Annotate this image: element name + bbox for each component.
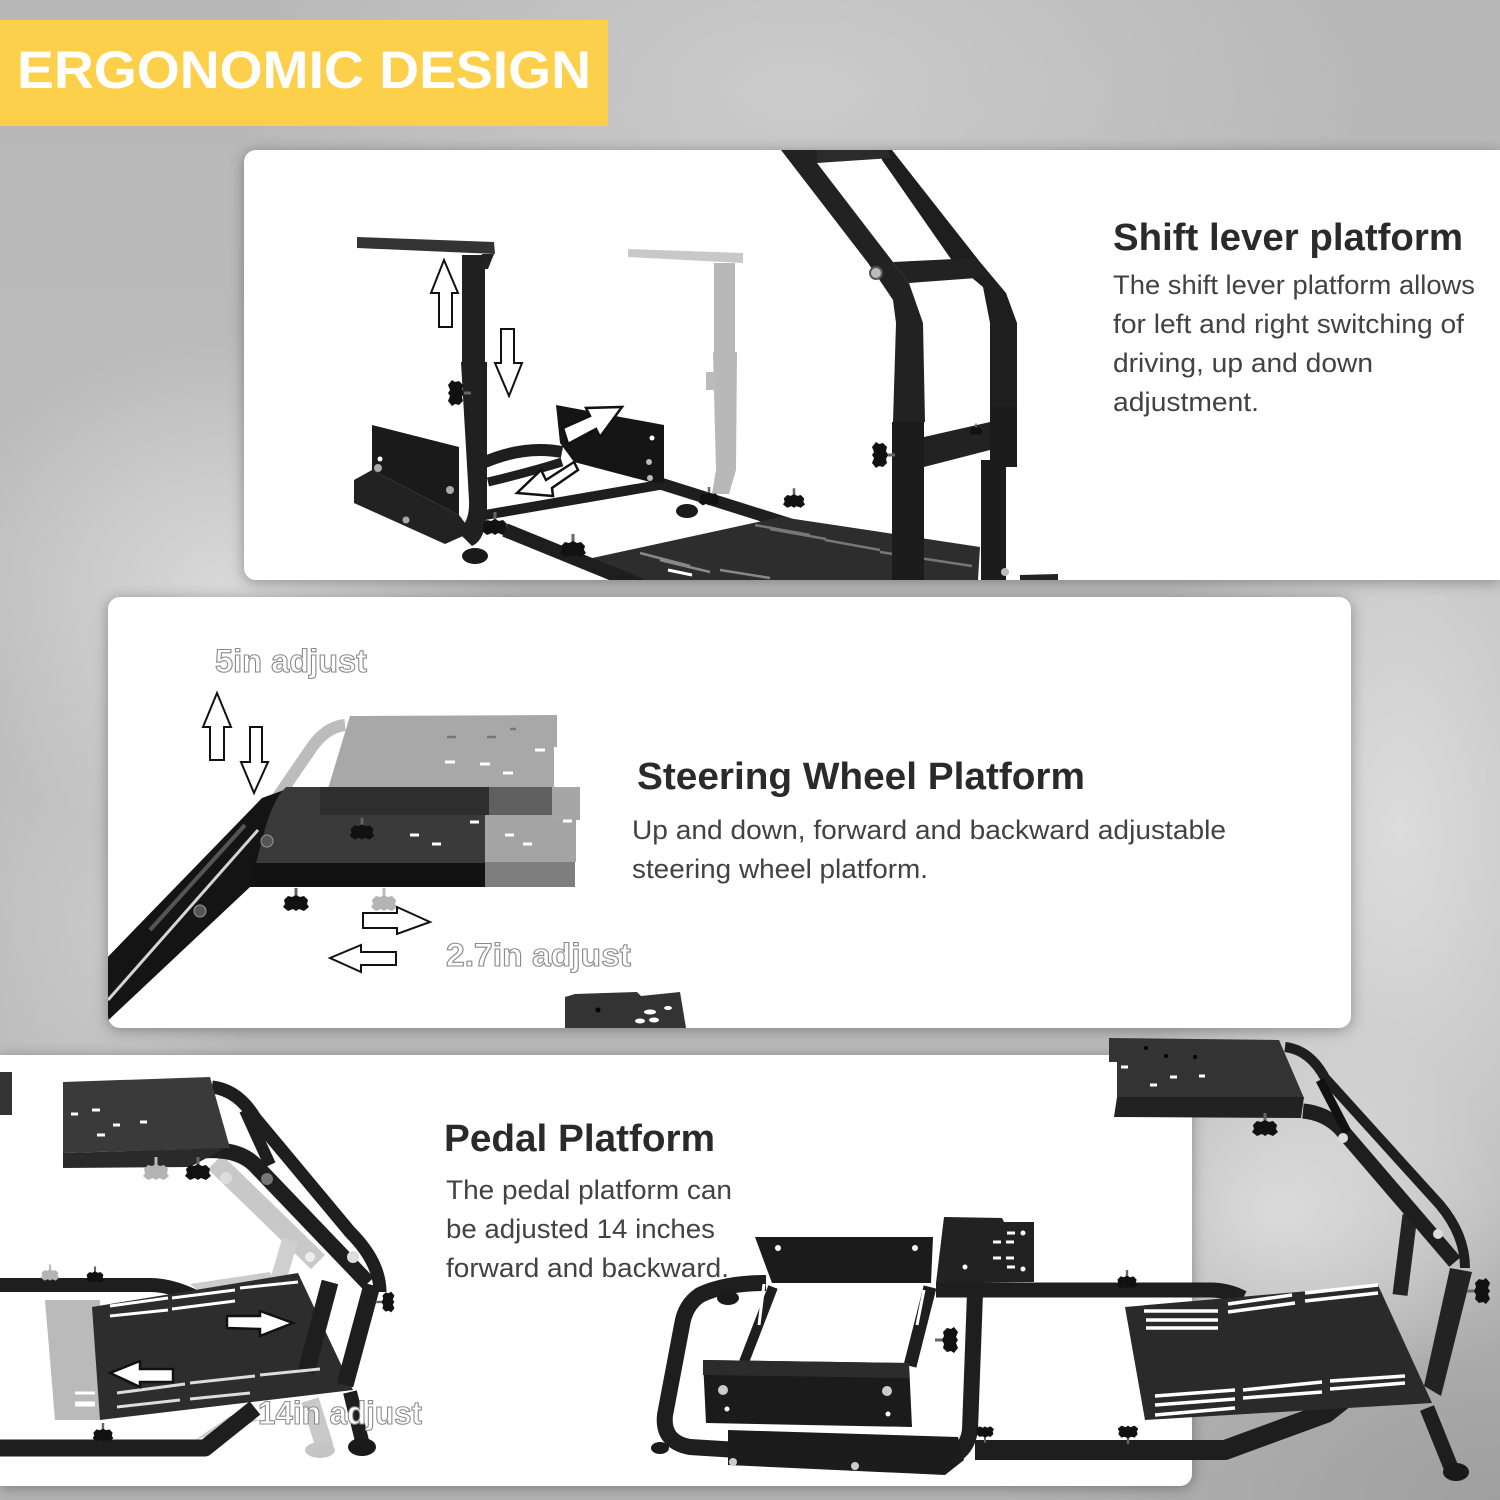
arrow: right — [363, 907, 430, 934]
arrow: left — [110, 1361, 173, 1387]
photo: pedal plate section — [505, 517, 980, 585]
photo: full assembled cockpit frame — [651, 1038, 1490, 1481]
arrow: down — [495, 329, 522, 396]
description: The pedal platform can — [446, 1175, 732, 1205]
panel: steering wheel platform — [100, 597, 1351, 1028]
description — [1113, 270, 1475, 417]
arrow: back left — [517, 462, 578, 496]
outline label: 2.7in adjust: 2.7in adjust — [446, 937, 631, 973]
description: Up and down, forward and backward adjustable — [632, 815, 1226, 845]
photo: ghost shift arm — [628, 249, 743, 494]
arrow: up — [203, 693, 231, 760]
photo: wheel hoop frame — [781, 150, 1058, 580]
heading: Shift lever platform — [1113, 217, 1463, 259]
photo: adjusted plate and arm — [100, 787, 580, 1028]
heading: Steering Wheel Platform — [637, 756, 1085, 798]
description: The shift lever platform allows — [1113, 270, 1475, 300]
photo: shift lever frame — [354, 237, 805, 564]
arrow: down — [241, 727, 268, 793]
description — [632, 815, 1226, 884]
banner: ergonomic design — [0, 20, 608, 126]
description — [446, 1175, 732, 1283]
arrow: forward right — [563, 407, 622, 444]
description: driving, up and down — [1113, 348, 1373, 378]
banner title: ERGONOMIC DESIGN — [17, 41, 591, 100]
description: adjustment. — [1113, 387, 1259, 417]
description: for left and right switching of — [1113, 309, 1465, 339]
description: forward and backward. — [446, 1253, 729, 1283]
arrow: right — [227, 1311, 293, 1336]
panel: pedal platform — [0, 1055, 1192, 1486]
description: steering wheel platform. — [632, 854, 928, 884]
outline label: 5in adjust: 5in adjust — [215, 643, 367, 679]
panel: shift lever platform — [244, 150, 1500, 585]
photo: pedal plate fragment — [565, 992, 686, 1028]
arrow: up — [431, 260, 458, 327]
description: be adjusted 14 inches — [446, 1214, 715, 1244]
arrow: left — [330, 945, 396, 972]
photo: ghost raised plate — [262, 715, 557, 820]
photo: left frame with ghost position — [0, 1072, 394, 1458]
heading: Pedal Platform — [444, 1118, 715, 1160]
outline label: 14in adjust: 14in adjust — [258, 1395, 422, 1431]
